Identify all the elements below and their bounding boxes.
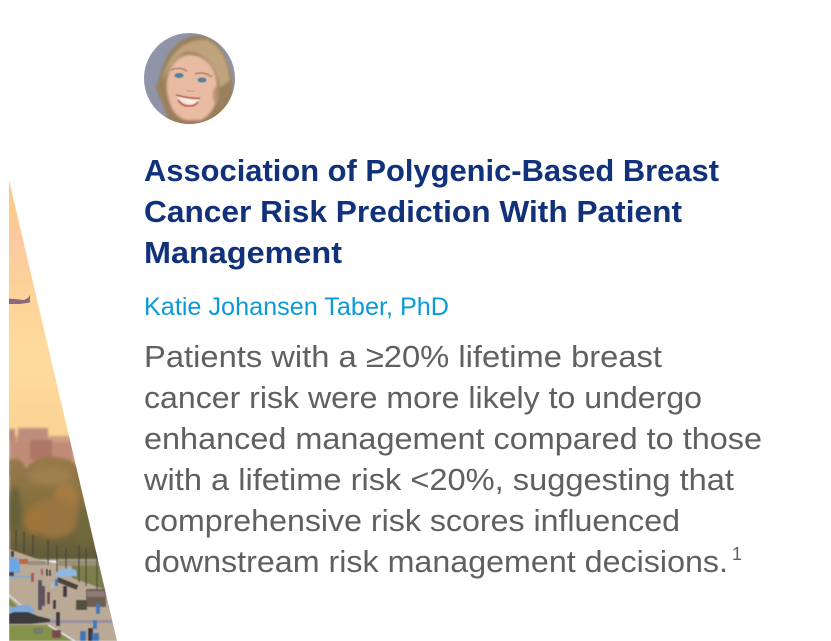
bottom lawn <box>9 625 72 641</box>
portrait background <box>144 33 236 125</box>
parked people row <box>56 577 78 590</box>
body text: with a lifetime risk <20%, suggesting that <box>143 462 734 497</box>
hair <box>156 36 233 126</box>
nose <box>187 90 195 92</box>
dark pedestrians <box>11 551 93 641</box>
icon: airplane <box>9 295 30 304</box>
photo: city mall at sunset in a triangular crop <box>9 180 120 641</box>
cheek shadow <box>213 87 219 103</box>
ground scene <box>9 530 120 641</box>
bike and bench <box>33 628 43 634</box>
blue van <box>9 558 20 573</box>
left lawn strip <box>9 598 18 607</box>
stripe on path <box>50 620 112 623</box>
author name: Katie Johansen Taber, PhD <box>144 293 449 321</box>
body text: Patients with a ≥20% lifetime breast <box>144 339 662 374</box>
trailer <box>76 600 87 610</box>
pink pedestrians <box>31 569 43 582</box>
face <box>167 55 217 121</box>
tree trunks <box>16 530 97 590</box>
body text: enhanced management compared to those <box>144 421 762 456</box>
sky <box>9 180 70 440</box>
title: Cancer Risk Prediction With Patient <box>144 194 682 229</box>
eyebrows <box>171 68 212 77</box>
blue car lower <box>9 605 34 614</box>
body text <box>143 339 762 579</box>
brown van <box>86 589 106 607</box>
body text: downstream risk management decisions. <box>144 544 728 579</box>
neck shadow <box>180 119 204 124</box>
title: Association of Polygenic-Based Breast <box>144 153 719 188</box>
body text: 1 <box>732 544 742 564</box>
mouth <box>177 96 199 104</box>
title: Management <box>144 235 342 270</box>
distant buildings <box>9 428 84 476</box>
lamp post cluster <box>38 580 42 610</box>
trees <box>9 456 98 562</box>
road <box>9 549 120 641</box>
title <box>144 153 719 270</box>
body text: comprehensive risk scores influenced <box>144 503 680 538</box>
eyes <box>174 73 184 78</box>
dark car <box>9 612 51 624</box>
blue car <box>55 568 77 577</box>
blue pedestrians <box>51 579 100 641</box>
background lawn <box>57 560 100 567</box>
barrier <box>19 559 28 564</box>
body text: cancer risk were more likely to undergo <box>144 380 702 415</box>
portrait photo <box>144 33 236 126</box>
